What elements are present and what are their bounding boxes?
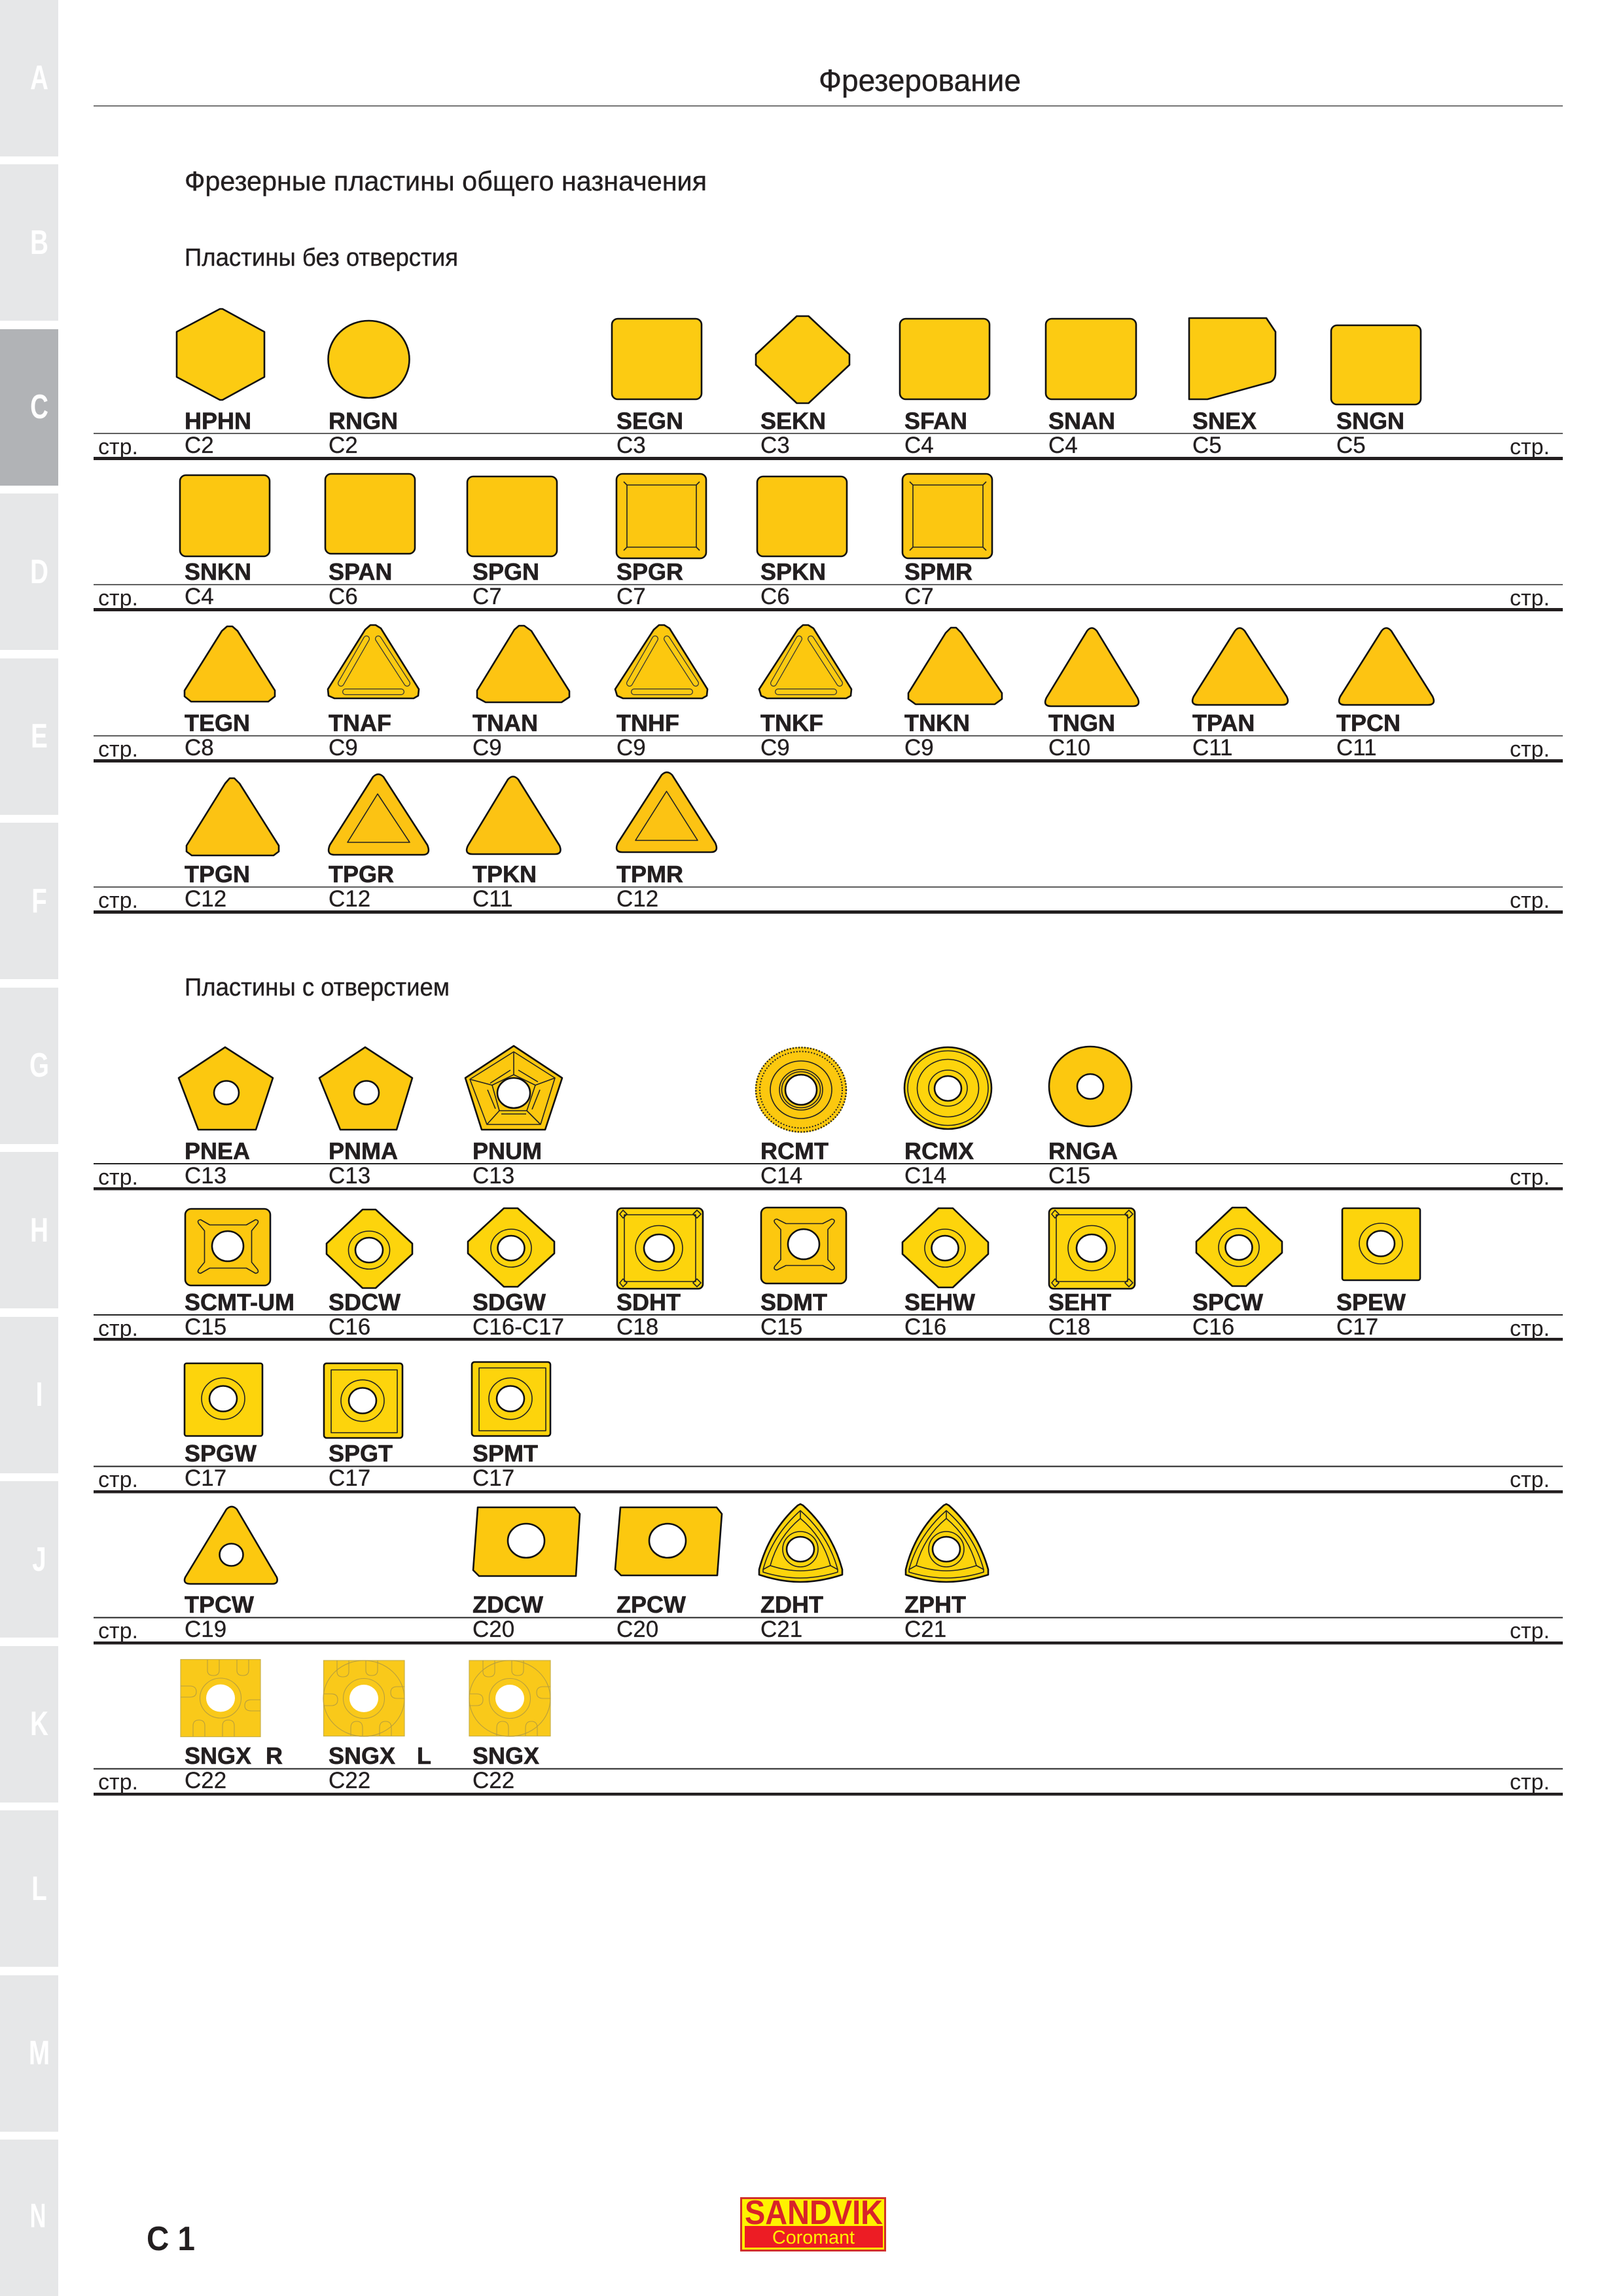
insert SNGN — [1331, 325, 1421, 458]
insert PNUM — [465, 1046, 562, 1189]
insert SNEX: C5 — [1192, 433, 1222, 458]
insert SCMT-UM: C15 — [185, 1314, 226, 1340]
side index tabs: B — [30, 223, 48, 261]
insert SNAN: C4 — [1048, 433, 1078, 458]
side index tabs: A — [30, 58, 48, 96]
insert SNGX: C22 — [473, 1768, 514, 1793]
row 3 triangular inserts — [94, 625, 1563, 762]
insert SPAN — [325, 474, 415, 609]
subheading: inserts with hole: Пластины с отверстием — [185, 974, 450, 1001]
subheading: inserts without hole: Пластины без отверстия — [185, 244, 458, 272]
insert SCMT-UM: SCMT-UM — [185, 1289, 294, 1316]
insert TNAN: TNAN — [473, 709, 538, 736]
insert SDCW — [327, 1210, 412, 1340]
insert SPGR: SPGR — [616, 558, 683, 585]
row 9 inserts with hole: стр. — [1510, 1770, 1550, 1795]
insert SPCW: C16 — [1192, 1314, 1234, 1340]
insert TNHF — [615, 625, 707, 761]
insert TPGR — [329, 774, 429, 912]
insert SPKN: C6 — [760, 584, 790, 609]
insert TPAN: C11 — [1192, 735, 1233, 761]
insert SDCW: SDCW — [329, 1289, 401, 1316]
insert SDHT — [616, 1208, 703, 1340]
insert TNAF: TNAF — [329, 709, 391, 736]
insert RCMX: RCMX — [904, 1138, 974, 1164]
side index tabs: L — [31, 1869, 47, 1907]
insert SEGN: SEGN — [616, 407, 683, 435]
insert PNUM: PNUM — [473, 1138, 542, 1164]
insert TPCN — [1336, 628, 1434, 761]
insert SNGX R: C22 — [185, 1768, 226, 1793]
insert SPMT: SPMT — [473, 1440, 538, 1467]
row 4 triangular inserts: стр. — [98, 888, 138, 913]
insert SPCW — [1192, 1208, 1282, 1340]
insert SEGN — [612, 319, 702, 458]
insert TPCW: C19 — [185, 1617, 226, 1642]
insert RNGN: RNGN — [329, 407, 398, 435]
row 4 triangular inserts: стр. — [1510, 888, 1550, 913]
insert TPAN — [1192, 628, 1288, 761]
insert SNEX — [1189, 318, 1275, 458]
insert RCMX — [904, 1047, 991, 1189]
insert SDMT: SDMT — [760, 1289, 827, 1316]
insert SDHT: C18 — [616, 1314, 658, 1340]
insert RNGA: C15 — [1048, 1163, 1090, 1189]
row 3 triangular inserts: стр. — [98, 737, 138, 762]
insert PNEA: PNEA — [185, 1138, 250, 1164]
insert TNAN — [473, 626, 569, 761]
insert SPGN: C7 — [473, 584, 502, 609]
insert TPGN: TPGN — [185, 861, 250, 888]
side index tabs — [0, 0, 58, 2296]
row 7 inserts with hole — [94, 1362, 1563, 1494]
insert SNGX L: SNGX — [329, 1742, 395, 1769]
insert ZPHT: C21 — [904, 1617, 946, 1642]
row 2 inserts without hole: стр. — [1510, 586, 1550, 611]
page header title: Фрезерование — [819, 63, 1021, 98]
insert TNKF: C9 — [760, 735, 790, 761]
insert SEHT: C18 — [1048, 1314, 1090, 1340]
insert SNGX L: L — [417, 1742, 431, 1769]
row 8 inserts with hole: стр. — [1510, 1619, 1550, 1643]
insert TNHF: TNHF — [616, 709, 679, 736]
row 4 triangular inserts — [94, 772, 1563, 914]
side index tabs: M — [29, 2034, 50, 2072]
insert SPGW: SPGW — [185, 1440, 257, 1467]
insert SPEW: SPEW — [1336, 1289, 1406, 1316]
insert SNAN — [1046, 319, 1136, 458]
insert SNKN: SNKN — [185, 558, 251, 585]
insert SPGN — [467, 476, 557, 609]
insert SPGT: SPGT — [329, 1440, 393, 1467]
insert PNMA — [319, 1047, 412, 1189]
insert SEKN: SEKN — [760, 407, 826, 435]
Sandvik Coromant logo: Coromant — [772, 2227, 855, 2248]
insert SNGX R: SNGX — [185, 1742, 251, 1769]
insert PNUM: C13 — [473, 1163, 514, 1189]
row 2 inserts without hole: стр. — [98, 586, 138, 611]
row 9 inserts with hole: стр. — [98, 1770, 138, 1795]
insert PNMA: C13 — [329, 1163, 370, 1189]
insert SCMT-UM — [185, 1209, 294, 1340]
insert SEGN: C3 — [616, 433, 646, 458]
row 6 inserts with hole — [94, 1208, 1563, 1341]
insert SDHT: SDHT — [616, 1289, 681, 1316]
insert SPGW: C17 — [185, 1465, 226, 1491]
insert SEKN: C3 — [760, 433, 790, 458]
row 8 inserts with hole: стр. — [98, 1619, 138, 1643]
insert ZDHT: C21 — [760, 1617, 802, 1642]
insert SNGX — [469, 1660, 550, 1793]
insert TNAF: C9 — [329, 735, 358, 761]
row 1 inserts without hole: стр. — [1510, 435, 1550, 459]
side index tabs: N — [30, 2197, 46, 2235]
side index tabs: H — [30, 1211, 48, 1249]
insert RCMX: C14 — [904, 1163, 946, 1189]
insert TEGN — [185, 626, 275, 761]
insert TPKN — [467, 776, 560, 912]
insert ZPCW — [615, 1507, 722, 1642]
insert SNGX L — [323, 1660, 431, 1793]
insert HPHN — [177, 309, 264, 458]
row 1 inserts without hole: стр. — [98, 435, 138, 459]
insert TNGN — [1045, 628, 1139, 761]
insert SDGW: SDGW — [473, 1289, 546, 1316]
main heading: Фрезерные пластины общего назначения — [185, 166, 707, 196]
side index tabs: D — [30, 552, 48, 590]
insert TNKN — [904, 628, 1002, 761]
insert RCMT: C14 — [760, 1163, 802, 1189]
insert SPGR — [616, 474, 706, 609]
insert SPKN: SPKN — [760, 558, 826, 585]
page number: C 1 — [147, 2220, 195, 2258]
insert SDGW: C16-C17 — [473, 1314, 564, 1340]
insert TNAF — [328, 625, 419, 761]
row 5 inserts with hole — [94, 1046, 1563, 1190]
side index tabs: C — [30, 387, 48, 425]
insert TPGN: C12 — [185, 886, 226, 912]
row 7 inserts with hole: стр. — [98, 1467, 138, 1492]
insert TPGN — [185, 778, 279, 912]
insert TPMR: C12 — [616, 886, 658, 912]
insert SPMR: C7 — [904, 584, 934, 609]
insert SDMT: C15 — [760, 1314, 802, 1340]
insert SPMR: SPMR — [904, 558, 972, 585]
insert ZDHT — [759, 1504, 842, 1642]
insert SNKN: C4 — [185, 584, 214, 609]
insert SPGW — [185, 1363, 262, 1491]
insert SPAN: C6 — [329, 584, 358, 609]
row 3 triangular inserts: стр. — [1510, 737, 1550, 762]
insert TPCW: TPCW — [185, 1591, 254, 1618]
row 1 inserts without hole — [94, 309, 1563, 460]
insert SFAN: SFAN — [904, 407, 967, 435]
insert SFAN: C4 — [904, 433, 934, 458]
insert SDCW: C16 — [329, 1314, 370, 1340]
row 6 inserts with hole: стр. — [98, 1316, 138, 1341]
insert SPEW: C17 — [1336, 1314, 1378, 1340]
row 2 inserts without hole — [94, 474, 1563, 611]
side index tabs: K — [30, 1704, 48, 1742]
Sandvik Coromant logo: SANDVIK — [745, 2194, 883, 2232]
insert SPKN — [757, 476, 847, 609]
row 7 inserts with hole: стр. — [1510, 1467, 1550, 1492]
insert PNEA: C13 — [185, 1163, 226, 1189]
insert ZPHT — [904, 1504, 988, 1642]
insert SNGN: SNGN — [1336, 407, 1404, 435]
row 8 inserts with hole — [94, 1504, 1563, 1644]
insert SDMT — [760, 1208, 846, 1340]
insert TPGR: TPGR — [329, 861, 394, 888]
insert RCMT — [755, 1047, 847, 1189]
insert ZPHT: ZPHT — [904, 1591, 966, 1618]
side index tabs: I — [36, 1375, 43, 1413]
insert TNKN: C9 — [904, 735, 934, 761]
insert TNKF: TNKF — [760, 709, 823, 736]
insert SPMT: C17 — [473, 1465, 514, 1491]
side index tabs: F — [31, 882, 47, 920]
insert ZDCW: C20 — [473, 1617, 514, 1642]
insert TNGN: C10 — [1048, 735, 1090, 761]
insert RNGA — [1048, 1047, 1132, 1189]
insert SFAN — [900, 319, 990, 458]
row 9 inserts with hole — [94, 1660, 1563, 1796]
insert PNMA: PNMA — [329, 1138, 398, 1164]
insert SNGX R — [181, 1660, 283, 1793]
insert TPMR — [616, 772, 717, 912]
insert TPKN: C11 — [473, 886, 513, 912]
insert SEHT — [1048, 1208, 1135, 1340]
insert TEGN: C8 — [185, 735, 214, 761]
insert RNGN — [329, 321, 410, 458]
insert SNGX R: R — [266, 1742, 283, 1769]
insert SNGX L: C22 — [329, 1768, 370, 1793]
insert SNGN: C5 — [1336, 433, 1366, 458]
side index tabs: E — [31, 717, 48, 755]
insert TPCW — [185, 1507, 277, 1642]
insert SEHT: SEHT — [1048, 1289, 1111, 1316]
insert TPKN: TPKN — [473, 861, 537, 888]
insert SPCW: SPCW — [1192, 1289, 1263, 1316]
insert HPHN: HPHN — [185, 407, 251, 435]
insert TNHF: C9 — [616, 735, 646, 761]
insert SPEW — [1336, 1208, 1420, 1340]
insert SDGW — [468, 1208, 564, 1340]
insert SPMR — [902, 474, 992, 609]
insert TNAN: C9 — [473, 735, 502, 761]
insert HPHN: C2 — [185, 433, 214, 458]
side index tabs: J — [32, 1540, 46, 1578]
Sandvik Coromant logo — [740, 2194, 886, 2251]
insert ZDCW: ZDCW — [473, 1591, 543, 1618]
insert SPMT — [472, 1362, 550, 1491]
insert SPGT — [324, 1363, 402, 1491]
insert RNGA: RNGA — [1048, 1138, 1118, 1164]
insert SEHW: SEHW — [904, 1289, 975, 1316]
insert TNKF — [759, 625, 851, 761]
insert SPGT: C17 — [329, 1465, 370, 1491]
insert SEHW — [902, 1208, 988, 1340]
insert TPGR: C12 — [329, 886, 370, 912]
insert SNKN — [180, 475, 270, 609]
insert TPCN: TPCN — [1336, 709, 1400, 736]
insert SNGX: SNGX — [473, 1742, 539, 1769]
insert TPCN: C11 — [1336, 735, 1377, 761]
insert ZDHT: ZDHT — [760, 1591, 823, 1618]
insert SPGR: C7 — [616, 584, 646, 609]
insert ZDCW — [473, 1507, 580, 1642]
insert TPMR: TPMR — [616, 861, 683, 888]
insert TNKN: TNKN — [904, 709, 970, 736]
row 6 inserts with hole: стр. — [1510, 1316, 1550, 1341]
insert TNGN: TNGN — [1048, 709, 1115, 736]
insert ZPCW: C20 — [616, 1617, 658, 1642]
insert RNGN: C2 — [329, 433, 358, 458]
insert SPAN: SPAN — [329, 558, 392, 585]
insert SEKN — [756, 316, 849, 458]
row 5 inserts with hole: стр. — [98, 1165, 138, 1190]
row 5 inserts with hole: стр. — [1510, 1165, 1550, 1190]
insert TPAN: TPAN — [1192, 709, 1255, 736]
insert RCMT: RCMT — [760, 1138, 829, 1164]
insert PNEA — [179, 1047, 273, 1189]
insert SPGN: SPGN — [473, 558, 539, 585]
insert SNEX: SNEX — [1192, 407, 1257, 435]
insert SEHW: C16 — [904, 1314, 946, 1340]
side index tabs: G — [29, 1046, 49, 1084]
insert TEGN: TEGN — [185, 709, 250, 736]
insert SNAN: SNAN — [1048, 407, 1115, 435]
insert ZPCW: ZPCW — [616, 1591, 686, 1618]
